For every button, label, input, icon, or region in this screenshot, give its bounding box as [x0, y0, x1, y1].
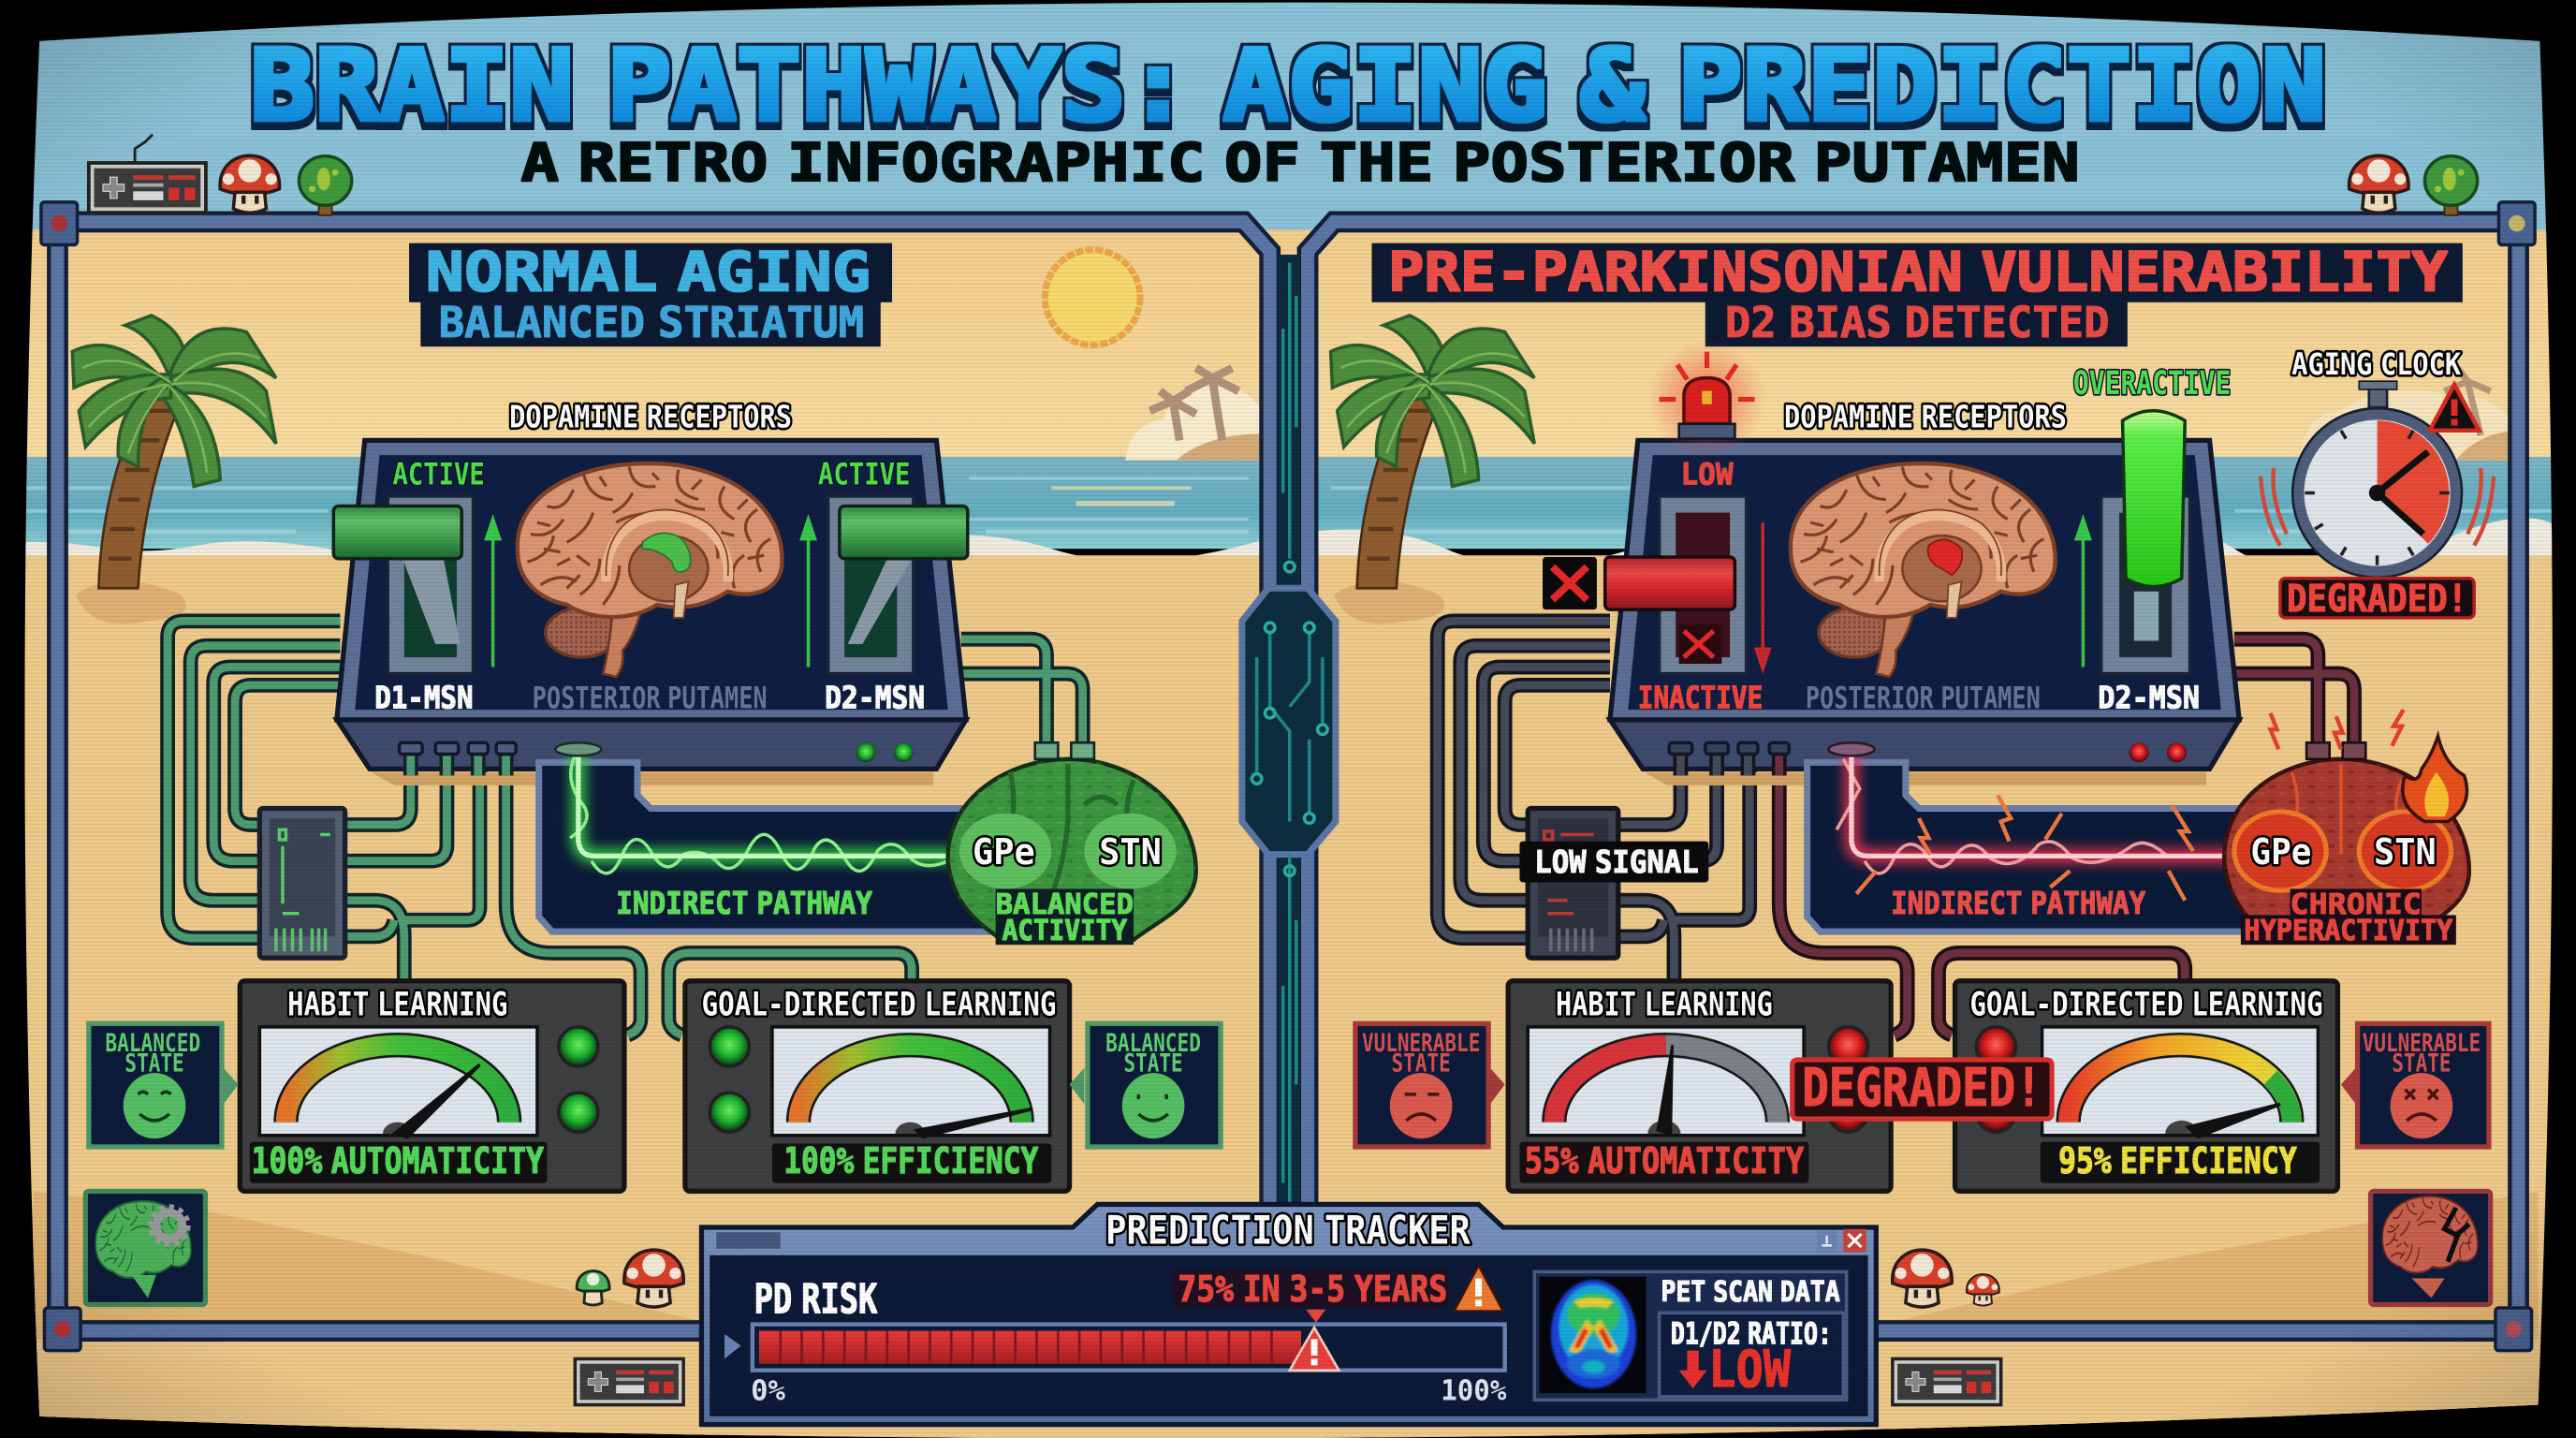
marker	[1306, 1310, 1325, 1323]
panel: habit learning vulnerable: HABIT LEARNING	[1556, 986, 1773, 1024]
gpe stn: balanced: GPe	[973, 831, 1035, 873]
right palm tree	[1331, 315, 1534, 624]
panel: balanced state right: BALANCED	[1105, 1030, 1201, 1058]
icon: mushroom top right	[2349, 155, 2408, 213]
gpe stn: hyperactive: HYPERACTIVITY	[2244, 915, 2452, 947]
gpe stn: balanced: ACTIVITY	[1003, 915, 1127, 947]
heading: pre-parkinsonian vulnerability: D2 BIAS DETECTED	[1725, 298, 2110, 347]
cables: left panel	[168, 621, 1083, 1035]
receptor labels	[374, 459, 925, 715]
arrow left of bar	[724, 1334, 741, 1358]
junction box left	[259, 808, 345, 958]
gpe stn: hyperactive: STN	[2374, 831, 2437, 873]
gpe stn: balanced	[948, 742, 1196, 947]
panel: balanced state left: BALANCED	[105, 1030, 200, 1058]
aging clock	[2261, 381, 2494, 578]
panel: habit learning normal: 100% AUTOMATICITY	[252, 1140, 545, 1182]
gpe stn: balanced: BALANCED	[996, 888, 1134, 921]
callout: degraded: DEGRADED!	[1802, 1058, 2042, 1119]
heading: normal aging: NORMAL AGING	[426, 241, 871, 304]
receptor labels: POSTERIOR PUTAMEN	[533, 682, 768, 715]
frame: right	[1308, 222, 2519, 1331]
title: BRAIN PATHWAYS: AGING & PREDICTION	[250, 28, 2326, 143]
distant island right	[2300, 368, 2522, 460]
icon: game controller top left	[89, 135, 206, 213]
lever d2 overactive	[2101, 411, 2190, 674]
icon: flame	[2403, 736, 2466, 822]
label: overactive: OVERACTIVE	[2073, 364, 2231, 403]
pet scan panel: PET SCAN DATA	[1661, 1276, 1840, 1309]
panel: balanced state left	[89, 1023, 239, 1147]
left palm tree	[72, 315, 276, 624]
heading: pre-parkinsonian vulnerability	[1372, 241, 2463, 347]
panel: goal-directed learning normal	[685, 981, 1070, 1191]
gpe stn: hyperactive: GPe	[2250, 831, 2311, 873]
brain with red putamen	[1791, 463, 2056, 677]
panel: left indirect pathway	[539, 742, 1003, 932]
receptor labels: ACTIVE	[393, 459, 485, 492]
label: dopamine receptors right: DOPAMINE RECEPTORS	[1784, 398, 2067, 434]
pd risk label: PD RISK	[754, 1275, 878, 1323]
panel: vulnerable state right	[2341, 1023, 2489, 1147]
panel: vulnerable state left	[1355, 1023, 1505, 1147]
pet scan panel: LOW	[1708, 1340, 1791, 1399]
console ports left	[400, 742, 516, 775]
icon: tree top left	[299, 156, 352, 215]
lever d1 inactive	[1605, 496, 1747, 674]
corner bolt top left	[41, 202, 78, 244]
junction box right	[1528, 808, 1618, 958]
panel: habit learning vulnerable: 55% AUTOMATICITY	[1525, 1140, 1805, 1182]
gpe stn: balanced: STN	[1099, 831, 1162, 873]
sand dunes	[33, 1191, 2539, 1438]
receptor labels: ACTIVE	[818, 459, 910, 492]
status leds	[856, 742, 914, 762]
icon: game controller bottom left	[575, 1358, 683, 1405]
icon: cracked brain	[2371, 1191, 2491, 1304]
panel: right indirect pathway	[1808, 742, 2267, 932]
pet scan panel: D1/D2 RATIO:	[1671, 1318, 1832, 1352]
panel: left indirect pathway: INDIRECT PATHWAY	[616, 885, 872, 921]
pet scan image	[1551, 1280, 1636, 1388]
corner bolt bottom right	[2496, 1308, 2532, 1351]
icon: mushroom top left	[220, 155, 280, 213]
icon: tree top right	[2424, 156, 2478, 215]
corner bolt top right	[2498, 202, 2535, 244]
panel: balanced state left: STATE	[124, 1049, 184, 1078]
panel: right indirect pathway: INDIRECT PATHWAY	[1891, 885, 2145, 921]
lever d1	[333, 496, 474, 674]
receptor labels: D2-MSN	[825, 679, 925, 715]
panel: vulnerable state right: STATE	[2392, 1049, 2452, 1078]
panel: prediction tracker	[701, 1204, 1876, 1425]
panel: vulnerable state right: VULNERABLE	[2363, 1030, 2481, 1058]
corner bolt bottom left	[44, 1308, 80, 1351]
panel: goal-directed learning vulnerable: GOAL-DIRECTED LEARNING	[1969, 986, 2323, 1024]
panel: goal-directed learning normal: 100% EFFICIENCY	[783, 1140, 1039, 1182]
frame: left	[57, 222, 1270, 1331]
scale labels	[751, 1374, 1506, 1407]
panel: goal-directed learning normal: GOAL-DIRECTED LEARNING	[701, 986, 1057, 1024]
label: degraded clock: DEGRADED!	[2287, 577, 2467, 621]
beach sand	[0, 555, 2576, 1438]
icon: warning triangle on clock	[2430, 385, 2479, 431]
sky band	[0, 0, 2576, 238]
receptor labels: INACTIVE	[1638, 679, 1763, 715]
sun	[1045, 250, 1140, 345]
tracker title: PREDICTION TRACKER	[1105, 1208, 1471, 1254]
panel: habit learning vulnerable	[1508, 981, 1891, 1191]
icon: warning triangle	[1454, 1265, 1503, 1312]
lower sand strip	[0, 1339, 2576, 1438]
pet scan panel	[1534, 1271, 1847, 1400]
subtitle: A RETRO INFOGRAPHIC OF THE POSTERIOR PUTAMEN	[520, 133, 2080, 194]
panel: balanced state right: STATE	[1123, 1049, 1183, 1078]
receptor labels: D1-MSN	[374, 679, 474, 715]
sea	[25, 457, 2552, 557]
label: low signal: LOW SIGNAL	[1534, 844, 1699, 880]
upper sand background	[0, 230, 2576, 460]
panel: vulnerable state left: STATE	[1392, 1049, 1451, 1078]
risk bar	[753, 1325, 1505, 1371]
icon: mushrooms bottom right	[1893, 1250, 1999, 1307]
scale labels: 100%	[1441, 1374, 1506, 1407]
heading: normal aging	[409, 241, 892, 347]
icon: sparks	[2271, 710, 2404, 749]
label: dopamine receptors left: DOPAMINE RECEPTORS	[509, 398, 792, 434]
cables: right panel	[1438, 621, 2354, 1035]
status leds	[2130, 742, 2187, 762]
lever d2	[828, 496, 968, 674]
brain with green putamen	[518, 463, 782, 677]
panel: habit learning normal: HABIT LEARNING	[287, 986, 507, 1024]
receptor labels: POSTERIOR PUTAMEN	[1806, 682, 2041, 715]
panel: vulnerable state left: VULNERABLE	[1362, 1030, 1480, 1058]
panel: balanced state right	[1070, 1023, 1221, 1147]
receptor labels: D2-MSN	[2098, 679, 2200, 715]
arrows up	[487, 520, 815, 668]
icon: red alarm	[1647, 340, 1766, 459]
icon: red x	[1543, 557, 1597, 609]
panel: goal-directed learning vulnerable	[1955, 981, 2337, 1191]
label: aging clock: AGING CLOCK	[2291, 348, 2461, 382]
heading: pre-parkinsonian vulnerability: PRE-PARKINSONIAN VULNERABILITY	[1388, 241, 2448, 304]
console: right dopamine receptors	[1543, 411, 2239, 785]
console ports right	[1669, 742, 1789, 775]
risk callout: 75% IN 3-5 YEARS	[1178, 1269, 1447, 1311]
receptor labels: LOW	[1680, 459, 1734, 492]
arrow down	[1756, 522, 1769, 668]
scale labels: 0%	[751, 1374, 785, 1407]
icon: brain gear	[85, 1191, 205, 1304]
icon: mushrooms bottom left	[577, 1250, 683, 1307]
icon: game controller bottom right	[1893, 1358, 2001, 1405]
panel: habit learning normal	[240, 981, 624, 1191]
gpe stn: hyperactive	[2224, 742, 2469, 947]
receptor labels	[1638, 459, 2200, 715]
panel: goal-directed learning vulnerable: 95% EFFICIENCY	[2058, 1140, 2297, 1182]
distant island left	[1125, 368, 1262, 460]
gpe stn: hyperactive: CHRONIC	[2291, 888, 2422, 921]
center circuit column	[1242, 255, 1336, 1224]
arrow up	[2076, 520, 2089, 668]
heading: normal aging: BALANCED STRIATUM	[439, 298, 864, 347]
window buttons	[1817, 1229, 1866, 1252]
console: left dopamine receptors	[333, 440, 968, 785]
